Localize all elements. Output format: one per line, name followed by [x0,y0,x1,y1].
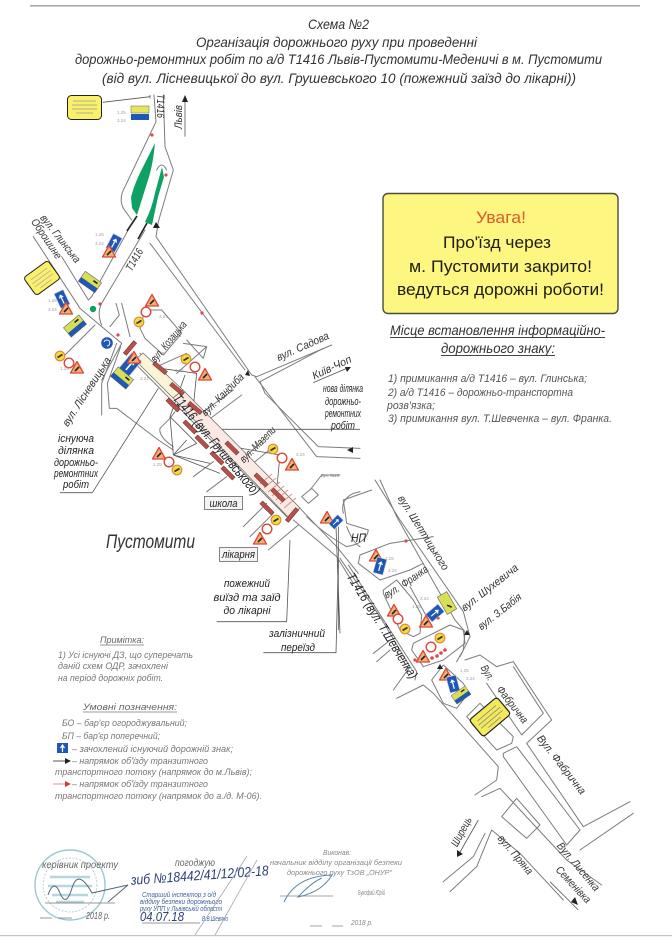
label: school: школа [210,498,238,510]
title: (від вул. Лісневицької до вул. Грушевського 10 (пожежний заїзд до лікарні)) [102,70,576,86]
sign codes: 1.25 [60,366,69,371]
road network: centre [60,343,360,633]
sign codes: 1.25 [460,668,469,673]
executor block: начальник відділу організації безпеки [270,858,403,867]
green islands [131,143,164,225]
road labels: вул. Лісневицька [60,355,114,429]
sign codes: 3.24 [296,452,305,457]
legend arrow: red [53,781,71,787]
road labels: Т1416 (вул. Грушевського) [170,391,264,498]
callout: new work section: нова ділянка [323,383,363,395]
notice panel: м. Пустомити закрито! [409,257,592,276]
sign codes: 1.25 [95,232,104,237]
project manager signature block: керівник проекту [42,860,119,871]
legend: – напрямок об'їзду транзитного [71,756,208,767]
legend: БО – бар'єр огороджувальний; [62,718,187,729]
road labels: Т1416 (вул. Т.Шевченка) [344,570,421,681]
road labels: вул. Пряна [495,833,535,877]
executor block: дорожнього руху ТзОВ „ОНУР" [287,868,392,877]
road labels: вул. Шептицького [395,493,451,573]
road labels: Львів [173,105,185,130]
notice panel [383,194,618,314]
callout: existing work section [53,433,98,491]
road labels: вул. [382,583,402,601]
work zone: Hrushevskoho road section [135,353,300,517]
sign codes: 1.25 [385,556,394,561]
road labels [28,94,602,906]
approval block: В.В.Шевяно [202,914,228,923]
legend: транспортного потоку (напрямок до а./д. М-06). [55,791,262,802]
road labels: Вул. №16 [321,473,339,478]
sign codes: 3.24 [140,376,149,381]
legend [53,702,262,802]
executor block: Виконав: [323,848,351,857]
note: 1) Усі існуючі ДЗ, що суперечать [58,650,193,661]
sign codes: 3.24 [48,307,57,312]
approval block [129,856,269,935]
approval block: зиб №18442/41/12/02-18 [129,862,269,888]
callout: railway crossing: залізничний [268,628,325,640]
road labels: вул. Козацька [148,319,190,365]
callout: fire access [214,578,280,617]
callout: new work section: ремонтних [324,408,361,420]
label: hospital: лікарня [221,549,255,561]
executor block [270,848,403,927]
information board 3 [469,697,511,737]
road labels: Т1416 [124,246,147,273]
information board 1 [68,96,102,120]
callout: fire access: до лікарні [224,605,271,617]
project manager signature block [40,860,128,922]
title: Організація дорожнього руху при проведенні [196,34,478,50]
sign codes: 1.25 [412,604,421,609]
callout: existing work section: ділянка [58,445,94,457]
callout: existing work section: ремонтних [53,468,98,480]
road labels: вул. З.Бабія [476,591,524,633]
callout: existing work section: дорожньо- [54,457,98,469]
information board 2 [23,260,61,296]
sign location list: розв'язка; [386,400,435,412]
title: дорожньо-ремонтних робіт по а/д Т1416 Львів-Пустомити-Меденичі в м. Пустомити [75,51,602,67]
callout: fire access: пожежний [224,578,270,590]
sign codes: 1.25 [153,462,162,467]
sign location list: 2) а/д Т1416 – дорожньо-транспортна [387,387,573,399]
red detour markers [98,133,440,662]
callout: fire access: виїзд та заїд [214,592,280,604]
approval block: 04.07.18 [140,909,185,924]
project manager signature block: 2018 р. [85,911,110,922]
sign codes: 3.24 [117,118,126,123]
road labels: Семенівка [553,864,593,906]
legend icon: covered sign [57,743,68,753]
sign codes: 3.24 [388,568,397,573]
road labels: вул. Шухевича [459,562,521,614]
sign codes: 1.25 [117,110,126,115]
road labels: Вул. Фабрична [534,733,588,797]
road labels: Фабрична [494,684,530,726]
road labels: Оброшине [28,217,64,261]
note: Примітка: [100,635,144,646]
title: Схема №2 [308,16,369,32]
legend: Умовні позначення: [82,702,177,713]
executor block: 2018 р. [350,918,373,927]
callout: existing work section: існуюча [58,433,94,445]
sign location list: 3) примикання вул. Т.Шевченка – вул. Франка. [388,413,612,425]
sign codes: 1.25 [48,298,57,303]
road network: north [33,95,332,380]
road labels: Ширець [449,815,475,849]
direction arrowheads [153,95,578,905]
scan edge bottom [0,935,672,936]
executor block: Букофай Юрій [358,888,385,897]
callout: new work section [323,383,363,432]
legend: – напрямок об'їзду транзитного [71,779,208,790]
road labels: Франка [399,563,431,591]
approval block: відділу безпеки дорожнього [140,897,222,906]
sign codes: 3.24 [159,314,168,319]
round stamp [35,850,105,920]
notice panel: Про'їзд через [443,233,551,252]
approval block: погоджую [175,858,215,869]
sign location list: 1) примикання а/д Т1416 – вул. Глинська; [388,373,587,385]
legend: БП – бар'єр поперечний; [62,731,160,742]
sign location heading: дорожнього знаку: [441,340,555,356]
road network: south [263,480,633,910]
road labels: Вул. [478,663,496,683]
road labels: вул. Мазепи [237,424,279,466]
title [75,16,602,86]
sign location heading [390,322,605,356]
sign codes: 1.25 [175,368,184,373]
legend arrow: black [53,758,71,764]
notice panel: ведуться дорожні роботи! [397,280,604,299]
note [58,635,193,684]
sign codes: 3.24 [420,596,429,601]
scan edge top [30,5,640,7]
notice panel: Увага! [476,208,526,227]
legend: – зачохлений існуючий дорожній знак; [71,744,233,755]
sign location list [386,373,612,425]
legend: транспортного потоку (напрямок до м.Львів); [55,767,252,778]
approval block: руху УПП у Львівській області [139,904,222,913]
road labels: НП [351,531,366,545]
callout: railway crossing [268,628,325,654]
sign location heading: Місце встановлення інформаційно- [390,322,605,338]
road labels: вул. Глинська [37,212,83,266]
road labels: Вул. Лисенка [554,840,602,894]
sign codes: 3.24 [95,241,104,246]
callout: new work section: робіт [330,420,355,432]
barriers [123,341,299,522]
sign codes [48,110,475,681]
sign codes: 3.24 [466,676,475,681]
road labels: Київ-Чоп [310,354,354,382]
note: даній схем ОДР, зачохлені [58,661,169,672]
callout: railway crossing: переїзд [281,642,315,654]
road labels: Т1416 [154,94,166,119]
approval block: Старший інспектор з о/д [142,890,216,899]
callout: new work section: дорожньо- [325,396,361,408]
town name: Пустомити [106,532,195,553]
kerbs [127,216,147,239]
note: на період дорожніх робіт. [58,673,163,684]
callout: existing work section: робіт [62,479,89,491]
road signs [54,106,471,704]
road labels: вул. Кандиба [199,371,247,419]
road labels: вул. Садова [275,330,331,364]
